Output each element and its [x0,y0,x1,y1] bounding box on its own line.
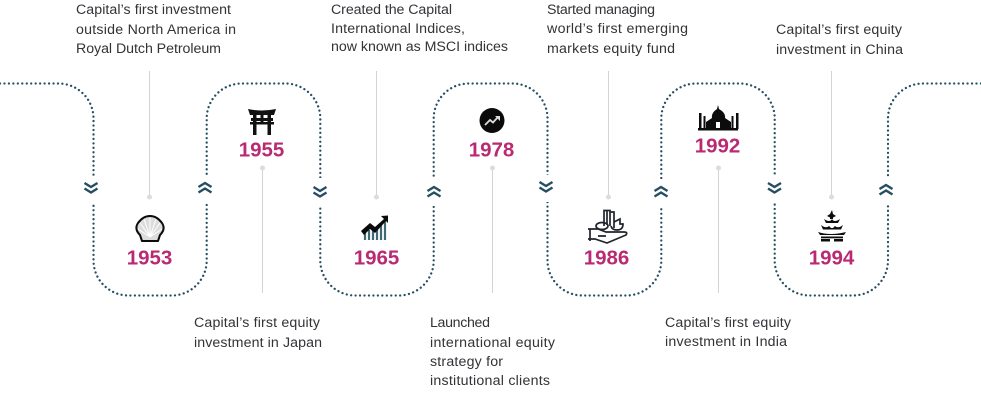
chevron: up 1 [198,176,213,203]
year 1965: 1965 [354,246,399,270]
text 1994: investment in China [776,42,903,58]
text 1978: Launched [430,315,490,331]
text 1986: markets equity fund [547,41,675,57]
text 1994: Capital’s first equity [776,22,903,38]
text 1965: now known as MSCI indices [331,39,508,55]
text 1992: Capital’s first equity [665,315,792,331]
chevron: up 3 [654,179,669,206]
text 1965 [331,2,508,55]
dotted timeline path [0,84,981,296]
text 1994 [776,22,903,58]
connector 1986 [606,71,611,200]
milestone 1978 [430,108,556,389]
icon: shell [136,216,164,241]
chevron: down 4 [767,176,782,203]
text 1955 [194,315,322,351]
icon: rising chart [361,216,388,240]
text 1953: Royal Dutch Petroleum [76,41,221,57]
icon: growth circle [480,108,504,133]
icon: pagoda [818,210,846,242]
text 1992: investment in India [665,334,787,350]
icon: hand holding coins [588,210,627,243]
connector 1992 [716,166,721,293]
milestone 1965 [331,2,508,270]
year 1992: 1992 [695,134,740,158]
text 1992 [665,315,792,350]
milestone 1955 [194,109,322,351]
text 1986: world’s first emerging [546,21,688,37]
milestone 1953 [76,2,236,270]
text 1986 [546,2,688,57]
text 1978: strategy for [430,354,503,370]
year 1986: 1986 [584,246,629,270]
text 1965: Created the Capital [331,2,452,18]
year 1955: 1955 [239,138,284,162]
milestone 1994 [776,22,903,270]
icon: Taj Mahal [698,105,738,130]
text 1953: outside North America in [76,22,236,38]
chevron: down 2 [312,178,327,206]
milestone 1992 [665,105,792,350]
chevron: down 3 [539,175,554,202]
connector 1953 [147,71,152,200]
connector 1965 [374,71,379,200]
connector 1978 [490,166,495,293]
chevron: up 4 [880,177,895,204]
text 1953: Capital’s first investment [76,2,231,18]
chevron: down 1 [84,176,99,203]
text 1955: investment in Japan [194,335,322,351]
year 1978: 1978 [469,138,514,162]
year 1994: 1994 [809,246,855,270]
text 1978 [430,315,556,389]
text 1978: institutional clients [430,373,550,389]
icon: torii gate [248,109,276,135]
text 1978: international equity [430,335,556,351]
milestone 1986 [546,2,688,270]
chevron: up 2 [426,179,441,206]
connector 1994 [829,71,834,200]
text 1955: Capital’s first equity [194,315,321,331]
year 1953: 1953 [127,246,172,270]
text 1953 [76,2,236,57]
connector 1955 [260,166,265,293]
text 1986: Started managing [547,2,655,18]
text 1965: International Indices, [331,21,465,37]
